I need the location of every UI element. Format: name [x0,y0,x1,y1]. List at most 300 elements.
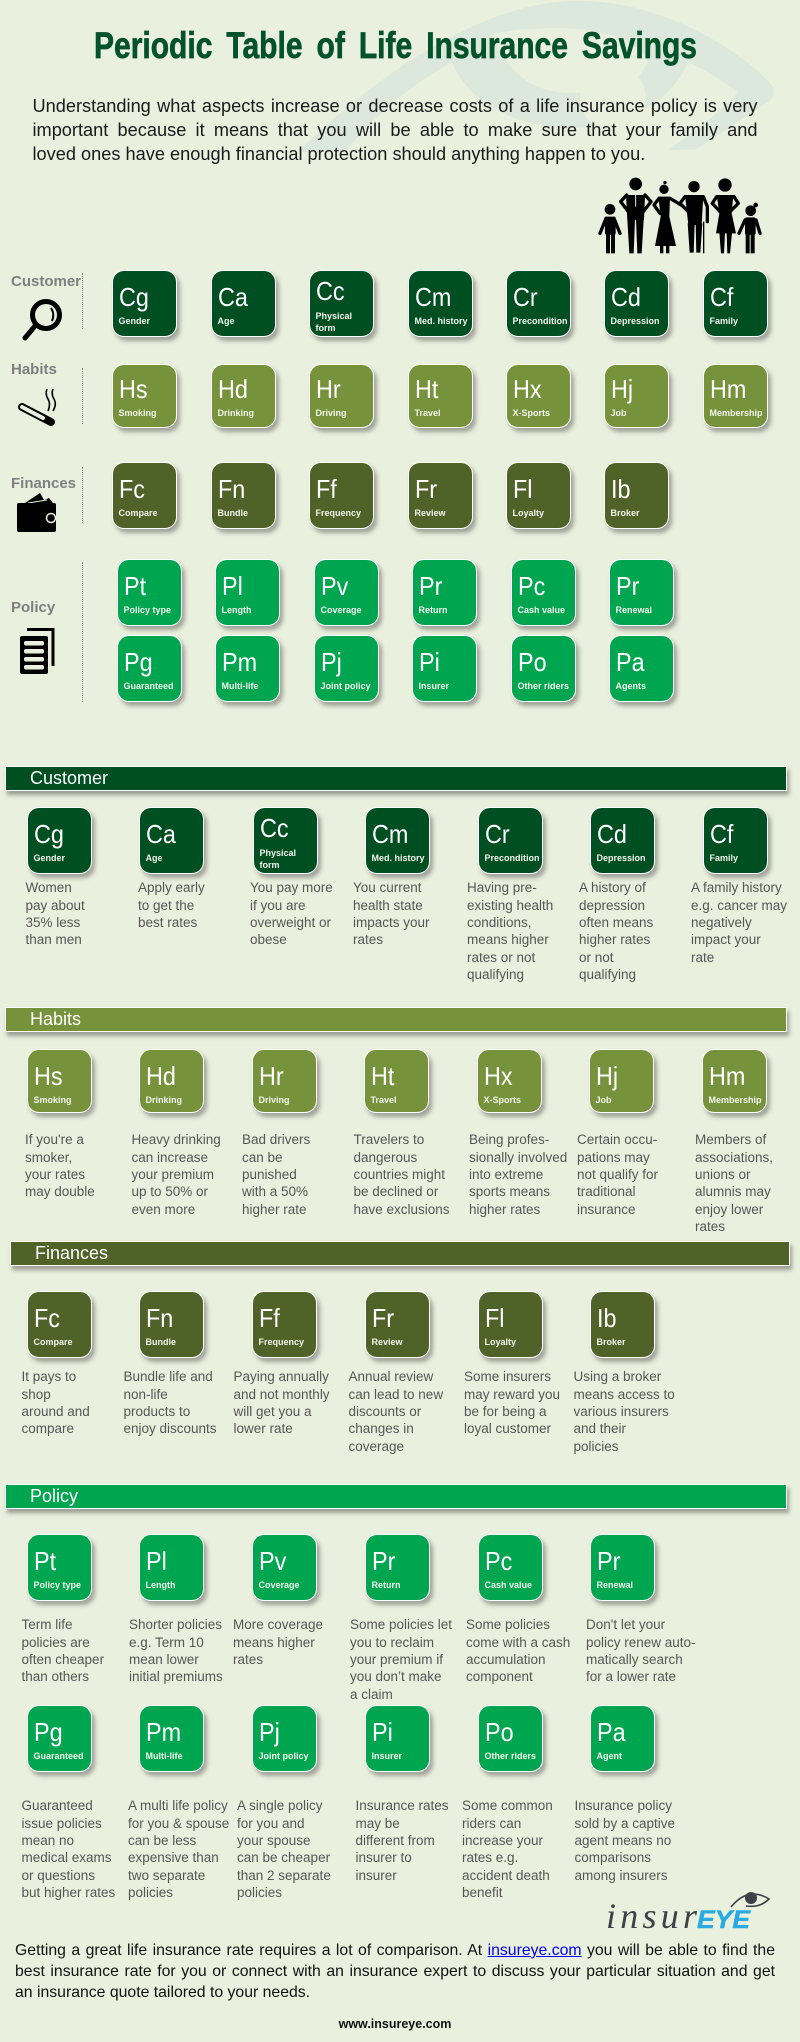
tile: Pt [27,1534,92,1601]
tile: Pj: Joint policy [258,1750,309,1760]
text: Pm: A multi life policy [128,1798,228,1813]
icon: documents [20,628,54,674]
text: Pc: come with a cash [466,1635,570,1650]
tile: Ff [309,462,374,529]
tile: Fl [478,1291,543,1358]
text: Fr: can lead to new [348,1387,443,1402]
tile: Fl: Loyalty [512,508,544,518]
text: Cf: impact your [691,932,761,947]
tile: Cf [703,270,768,337]
tile: Hm [702,1049,767,1113]
text: Fn: Bundle life and [124,1369,213,1384]
section bar: Habits: Habits [30,1009,81,1029]
text: Cm: rates [353,932,383,947]
tile: Ib: Ib [597,1302,617,1332]
tile: Cd: Cd [611,282,641,312]
tile: Hd: Hd [146,1060,176,1090]
tile: Pr return: Pr [419,570,442,600]
tile: Fc: Fc [119,474,145,504]
text: Ht: be declined or [354,1184,438,1199]
logo: insurEYE: EYE [697,1906,751,1934]
text: Pr return: your premium if [350,1652,443,1667]
tile: Pr return: Pr [372,1546,395,1576]
tile: Cg: Cg [34,818,64,848]
text: Fr: changes in [348,1421,414,1436]
tile: Cr: Precondition [512,316,568,326]
tile: Fn: Fn [218,474,245,504]
tile: Fl: Fl [485,1302,505,1332]
tile: Cc [309,270,374,337]
text: Hm: Members of [695,1132,766,1147]
tile: Pi [412,635,477,702]
text: Pc: component [466,1669,533,1684]
tile: Cf: Family [710,852,738,862]
tile: Cm: Cm [415,282,451,312]
text: Hd: your premium [132,1167,214,1182]
tile: Pr renewal [609,559,674,626]
text: Cd: higher rates [579,932,650,947]
tile: Pi: Insurer [418,680,449,690]
icon: wallet [17,493,56,532]
text: Cc: overweight or [250,915,331,930]
tile: Pl: Pl [222,570,243,600]
text: Po: benefit [462,1885,503,1900]
tile: Pt: Policy type [34,1580,81,1590]
text: Pg: mean no [22,1833,74,1848]
text: Cg: Women [26,880,72,895]
text: Po: Some common [462,1798,553,1813]
tile: Ht [408,364,473,428]
text: Pm: can be less [128,1833,196,1848]
tile: Fr: Fr [372,1302,394,1332]
tile: Po: Po [485,1716,514,1746]
tile: Pr return: Return [372,1580,400,1590]
text: Pt: than others [22,1669,89,1684]
text: Cr: means higher [467,932,549,947]
text: Fr: coverage [348,1439,404,1454]
text: Po: rates e.g. [462,1850,518,1865]
tile: Ht: Ht [371,1060,394,1090]
tile: Pm [215,635,280,702]
text: Ca [138,880,205,930]
tile: Hx: Hx [513,374,542,404]
text: Fl [464,1369,560,1436]
label: Finances: Finances [11,475,76,492]
text: Cc [250,880,333,947]
text: Ca: best rates [138,915,197,930]
tile: Fn: Bundle [218,508,248,518]
tile: Cc: Cc [260,812,289,842]
tile: Fn: Fn [146,1302,173,1332]
tile: Cg: Gender [118,316,150,326]
tile: Hs: Hs [34,1060,63,1090]
text: Hj: not qualify for [577,1167,658,1182]
tile: Fc: Fc [34,1302,60,1332]
text: Cr: existing health [467,898,553,913]
row: Finances [11,462,674,536]
tile: Hx: Hx [484,1060,513,1090]
text: Pg: medical exams [22,1850,112,1865]
text: Cg: pay about [26,898,85,913]
text: Pa: Insurance policy [574,1798,672,1813]
tile: Pr renewal: Renewal [596,1580,633,1590]
tile: Hr [252,1049,317,1113]
tile: Hr: Hr [316,374,341,404]
text: Hr: Bad drivers [242,1132,310,1147]
tile: Ib [604,462,669,529]
tile: Pc: Pc [518,570,545,600]
tile: Hj [589,1049,654,1113]
tile: Pj: Joint policy [320,680,371,690]
text: Pg: or questions [22,1868,95,1883]
icon: cigarette [18,388,56,426]
tile: Pt: Pt [34,1546,56,1576]
text: Cc: obese [250,932,287,947]
tile: Hd [211,364,276,428]
text: Hx: Being profes- [469,1132,549,1147]
text: Pv: means higher [233,1635,315,1650]
text: Ib: policies [574,1439,619,1454]
section bar: Finances [10,1241,790,1266]
tile: Pr renewal: Pr [616,570,639,600]
tile: Ib: Broker [596,1336,626,1346]
tile: Hd: Drinking [146,1094,182,1104]
tile: Hr [309,364,374,428]
tile: Ib: Ib [611,474,631,504]
tile: Hj: Job [596,1094,612,1104]
text: Fl: loyal customer [464,1421,551,1436]
text: Pa: agent means no [574,1833,671,1848]
text: Cf [691,880,787,965]
text: Cd: qualifying [579,967,636,982]
text: Pj [237,1797,331,1901]
text: Pm: two separate [128,1868,205,1883]
section bar: Customer: Customer [30,768,108,788]
row: Habits [11,361,774,434]
text: Pc: accumulation [466,1652,546,1667]
text: Cr: Having pre- [467,880,537,895]
tile: Pt: Policy type [124,604,171,614]
tile: Pv [314,559,379,626]
tile: Pl [215,559,280,626]
tile: Fc: Compare [118,508,158,518]
tile: Cg [112,270,177,337]
section bar: Customer [5,766,787,791]
tile: Ca [139,807,204,874]
tile: Fn [139,1291,204,1358]
text: Hd: Heavy drinking [132,1132,221,1147]
tile: Cc: form [260,860,280,870]
tile: Ca: Ca [146,818,176,848]
text: Hr: punished [242,1167,297,1182]
text: Pg [22,1797,115,1901]
text: Pm: policies [128,1885,173,1900]
text: Ht: Travelers to [354,1132,424,1147]
intro paragraph: important because it means that you will be able to make sure that your family and [32,120,758,140]
text: Hx: higher rates [469,1202,540,1217]
text: Pa: sold by a captive [574,1816,675,1831]
tile: Pm: Multi-life [146,1750,182,1760]
tile: Hr: Driving [258,1094,290,1104]
text: Cr: rates or not [467,950,535,965]
tile: Pi: Pi [419,646,440,676]
tile: Pg: Guaranteed [34,1750,84,1760]
text: Hr: with a 50% [242,1184,308,1199]
tile: Cd: Depression [596,852,646,862]
text: Hx: into extreme [469,1167,543,1182]
row: Policy [11,559,680,708]
tile: Pg: Pg [124,646,153,676]
tile: Hs [27,1049,92,1113]
intro paragraph [32,96,758,164]
tile: Ff [252,1291,317,1358]
text: Pt: often cheaper [22,1652,104,1667]
text: Ht: countries might [354,1167,445,1182]
text: Ib: Using a broker [574,1369,661,1384]
tile: Hm: Membership [708,1094,762,1104]
text: Hd: up to 50% or [132,1184,208,1199]
text: Pv [233,1617,323,1667]
section bar: Finances: Finances [35,1243,108,1263]
text: Cc: You pay more [250,880,333,895]
tile: Ib: Broker [610,508,640,518]
text: Pm: for you & spouse [128,1816,229,1831]
text: Pr renewal: matically search [586,1652,683,1667]
tile: Fr [408,462,473,529]
tile: Hj: Job [610,408,627,418]
text: Pi: Insurance rates [356,1798,449,1813]
text: Cg: than men [26,932,82,947]
text: Pa: comparisons [574,1850,651,1865]
text: Hs: smoker, [25,1150,72,1165]
text: Pa: among insurers [574,1868,668,1883]
text: Hm: enjoy lower [695,1202,763,1217]
text: Cr: conditions, [467,915,532,930]
tile: Hx [477,1049,542,1113]
tile: Pg [117,635,182,702]
tile: Hx: X-Sports [484,1094,521,1104]
tile: Pa: Pa [616,646,645,676]
tile: Ff: Frequency [316,508,361,518]
label: Policy: Policy [11,599,55,616]
tile: Pi [365,1705,430,1772]
label: Habits: Habits [11,361,57,378]
text: Pm [128,1797,229,1901]
tile: Hd: Drinking [218,408,254,418]
text: Pr renewal: for a lower rate [586,1669,676,1684]
text: Hr [242,1132,310,1217]
text: Ff: will get you a [234,1404,312,1419]
label: Customer: Customer [11,273,81,290]
closing paragraph: an insurance quote tailored to your needs. [15,1984,310,2001]
text: Pr renewal [586,1616,696,1686]
text: Hs: your rates [25,1167,85,1182]
tile: Pg [27,1705,92,1772]
text: Fn: enjoy discounts [124,1421,217,1436]
text: Hs: If you're a [25,1132,84,1147]
tile: Fc [27,1291,92,1358]
text: Pv: More coverage [233,1617,323,1632]
text: Cm: health state [353,898,423,913]
text: Hr: can be [242,1150,283,1165]
tile: Ff: Frequency [258,1336,304,1346]
text: Pg: Guaranteed [22,1798,93,1813]
tile: Hm: Hm [710,374,746,404]
tile: Hd [139,1049,204,1113]
tile: Hs: Smoking [34,1094,72,1104]
tile: Fc [112,462,177,529]
tile: Pj: Pj [321,646,342,676]
panel: Habits details [4,1007,792,1234]
tile: Cc: Physical [260,848,296,858]
text: Cr: qualifying [467,967,524,982]
tile: Fn [211,462,276,529]
tile: Cf: Family [710,316,738,326]
text: Pt [22,1617,104,1684]
tile: Pt [117,559,182,626]
text: Hj: Certain occu- [577,1132,657,1147]
text: Cf: rate [691,950,714,965]
tile: Ht: Ht [415,374,438,404]
tile: Pj [252,1705,317,1772]
text: Cr [467,880,553,982]
tile: Pr return [365,1534,430,1601]
tile: Pa [609,635,674,702]
tile: Hx [506,364,571,428]
tile: Hd: Hd [218,374,248,404]
tile: Ib [590,1291,655,1358]
tile: Hm: Membership [710,408,763,418]
text: Pg: but higher rates [22,1885,115,1900]
tile: Cf: Cf [710,818,733,848]
text: Pi [356,1797,449,1884]
tile: Ca: Age [218,316,235,326]
text: Fn: non-life [124,1387,168,1402]
tile: Hr: Driving [316,408,347,418]
text: Pt: policies are [22,1635,90,1650]
tile: Cg: Gender [34,852,65,862]
text: Ib: various insurers [574,1404,669,1419]
row: Customer [11,270,774,344]
tile: Cc: form [316,323,336,333]
text: Cf: e.g. cancer may [691,898,787,913]
tile: Cm [365,807,430,874]
text: Fn [124,1369,217,1436]
text: Pj: for you and [237,1816,305,1831]
text: Hj: insurance [577,1202,636,1217]
text: Pr renewal: Don't let your [586,1617,665,1632]
tile: Pm: Pm [146,1716,181,1746]
periodic table overview panel [11,270,774,708]
text: Hs [25,1132,95,1199]
tile: Pt: Pt [124,570,146,600]
tile: Pv: Pv [259,1546,286,1576]
text: Hx: sports means [469,1184,550,1199]
text: Fl: be for being a [464,1404,547,1419]
tile: Pa: Agents [616,680,646,690]
tile: Cm [408,270,473,337]
text: Ht [354,1132,450,1217]
text: Pi: different from [356,1833,435,1848]
tile: Cc: Cc [316,276,345,306]
website address: www.insureye.com [339,2017,451,2031]
tile: Pr return: Return [418,604,448,614]
closing paragraph [0,1940,800,2003]
text: Hj: traditional [577,1184,636,1199]
text: Hs: may double [25,1184,95,1199]
tile: Cd: Depression [610,316,660,326]
text: Fl: Some insurers [464,1369,551,1384]
text: Pr return: you don’t make [350,1669,442,1684]
text: Ff [234,1369,330,1436]
tile: Pl: Length [222,604,252,614]
tile: Pc [478,1534,543,1601]
tile: Hj: Hj [596,1060,618,1090]
tile: Po: Other riders [484,1750,536,1760]
tile: Po [478,1705,543,1772]
tile: Pg: Pg [34,1716,63,1746]
tile: Pc: Cash value [518,604,565,614]
tile: Pg: Guaranteed [124,680,174,690]
tile: Cd [604,270,669,337]
tile: Hr: Hr [259,1060,284,1090]
text: Pr return: you to reclaim [350,1635,434,1650]
text: Hm: rates [695,1219,725,1234]
tile: Ff: Ff [259,1302,280,1332]
text: Pg: issue policies [22,1816,102,1831]
text: Po [462,1797,553,1901]
tile: Pj: Pj [259,1716,280,1746]
tile: Fl: Fl [513,474,533,504]
section bar: Policy: Policy [30,1486,78,1506]
text: Ca: to get the [138,898,194,913]
tile: Cm: Med. history [414,316,468,326]
text: Pj: can be cheaper [237,1850,330,1865]
text: Cd: depression [579,898,645,913]
text: Pr return: Some policies let [350,1617,452,1632]
text: Fc: shop [22,1387,51,1402]
text: Fc: around and [22,1404,90,1419]
text: Ib: and their [574,1421,626,1436]
text: Fc: It pays to [22,1369,76,1384]
text: Hj: pations may [577,1150,650,1165]
tile: Fc: Compare [34,1336,73,1346]
text: Pc: Some policies [466,1617,550,1632]
tile: Fl [506,462,571,529]
tile: Hj [604,364,669,428]
text: Pl: mean lower [129,1652,199,1667]
panel: Customer details [4,766,792,982]
tile: Hj: Hj [611,374,633,404]
text: Hm: alumnis may [695,1184,771,1199]
tile: Pc: Pc [485,1546,512,1576]
text: Hr: higher rate [242,1202,307,1217]
tile: Cc [253,807,318,874]
tile: Ht: Travel [370,1094,397,1104]
tile: Pr renewal [590,1534,655,1601]
tile: Cf: Cf [710,282,733,312]
text: Hx [469,1132,567,1217]
tile: Cf [703,807,768,874]
closing paragraph: Getting a great life insurance rate requires a lot of comparison. At insureye.com you will be able to find the [15,1942,775,1959]
text: Hd [132,1132,221,1217]
text: Cd [579,880,653,982]
tile: Cm: Med. history [372,852,425,862]
text: Hd: even more [132,1202,195,1217]
text: Po: accident death [462,1868,550,1883]
text: Pl: initial premiums [129,1669,223,1684]
text: Fc [22,1369,90,1436]
